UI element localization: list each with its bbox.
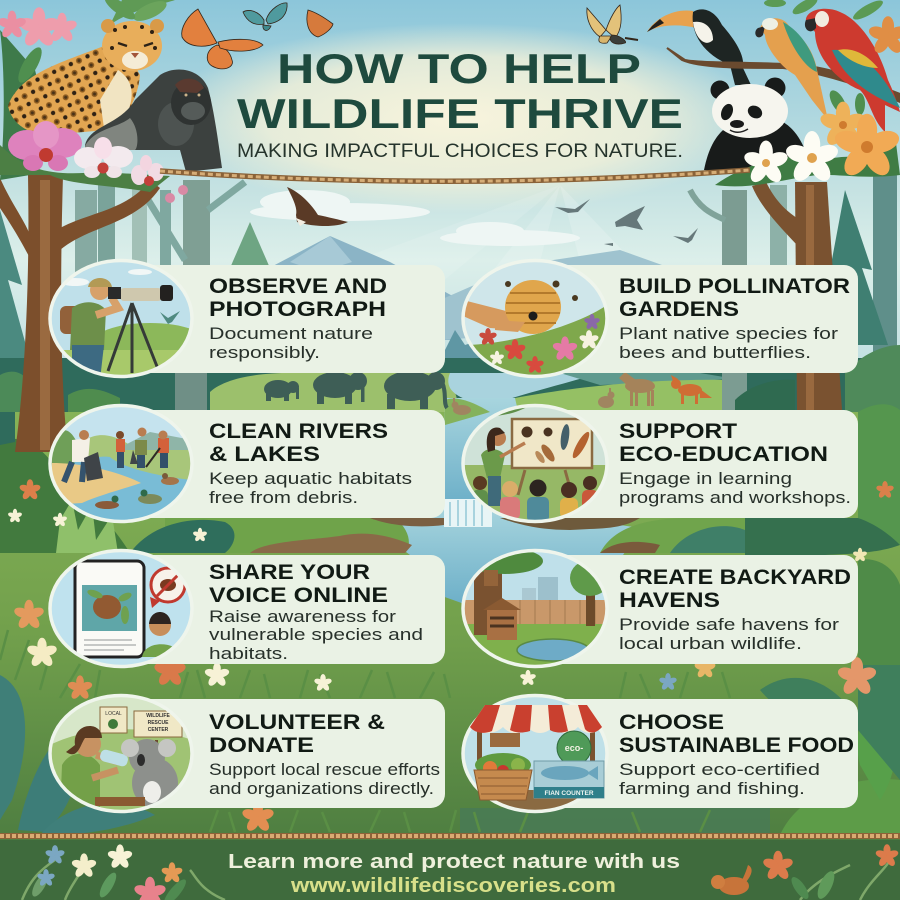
card: choose sustainable food <box>510 699 858 808</box>
main left tree with branches <box>0 175 160 452</box>
card: volunteer and donate <box>100 699 445 808</box>
card: observe and photograph <box>100 265 445 373</box>
card: volunteer and donate: Support local rescue efforts <box>209 760 440 779</box>
card: build pollinator gardens: Plant native species for <box>619 324 838 343</box>
distant wildlife: goat, fox and rabbit <box>598 366 712 408</box>
card: choose sustainable food: CHOOSE <box>619 711 724 734</box>
card: share your voice online: Raise awareness for <box>209 607 396 626</box>
icon: phone with turtle post and no-poaching badge <box>50 550 192 668</box>
card: support eco-education: Engage in learning <box>619 469 792 488</box>
card: clean rivers and lakes: & LAKES <box>209 443 320 466</box>
icon: market stall with produce basket and fish counter: eco- <box>565 743 583 753</box>
icon: volunteer feeding a koala: LOCAL <box>105 711 122 717</box>
card: build pollinator gardens: GARDENS <box>619 298 739 321</box>
card: support eco-education <box>510 410 858 518</box>
gorilla <box>85 69 222 172</box>
card: build pollinator gardens: bees and butterflies. <box>619 343 811 362</box>
macaws on branch <box>667 0 900 132</box>
icon: volunteer feeding a koala: CENTER <box>148 727 169 733</box>
icon: volunteer feeding a koala: RESCUE <box>148 720 169 726</box>
butterflies <box>182 3 638 69</box>
footer panel <box>0 840 900 900</box>
footer rope <box>0 833 900 839</box>
card: clean rivers and lakes: free from debris. <box>209 488 358 507</box>
card: create backyard havens: HAVENS <box>619 589 720 612</box>
card: volunteer and donate: and organizations directly. <box>209 779 434 798</box>
card: observe and photograph: PHOTOGRAPH <box>209 298 386 321</box>
foreground foliage and wildflowers <box>0 479 900 835</box>
icon: market stall with produce basket and fish counter: FIAN COUNTER <box>544 790 594 797</box>
icon: volunteer feeding a koala <box>50 695 192 815</box>
icon: teacher with children at a nature board <box>463 405 607 525</box>
card: share your voice online: habitats. <box>209 644 288 663</box>
card: choose sustainable food: SUSTAINABLE FOOD <box>619 734 854 757</box>
right side flower cluster <box>715 88 900 186</box>
panda <box>704 78 808 172</box>
card: observe and photograph: Document nature <box>209 324 373 343</box>
card: clean rivers and lakes: CLEAN RIVERS <box>209 420 388 443</box>
card: observe and photograph: OBSERVE AND <box>209 275 387 298</box>
footer panel: www.wildlifediscoveries.com <box>290 875 616 897</box>
card: support eco-education: SUPPORT <box>619 420 737 443</box>
title: HOW TO HELP <box>277 45 641 92</box>
card: share your voice online: SHARE YOUR <box>209 561 370 584</box>
rope across header <box>160 170 750 181</box>
icon: beehive and wildflowers <box>463 260 607 380</box>
distant wildlife: elephant herd and rabbit <box>264 371 471 415</box>
card: clean rivers and lakes: Keep aquatic habitats <box>209 469 412 488</box>
top left foliage and pink blossoms <box>0 0 175 180</box>
title: WILDLIFE THRIVE <box>237 90 683 137</box>
card: choose sustainable food: Support eco-certified <box>619 760 820 779</box>
toucan <box>647 9 751 85</box>
subtitle: MAKING IMPACTFUL CHOICES FOR NATURE. <box>237 141 683 162</box>
icon: market stall with produce basket and fish counter <box>463 695 607 815</box>
card: choose sustainable food: farming and fishing. <box>619 779 805 798</box>
card: share your voice online: VOICE ONLINE <box>209 584 388 607</box>
card: create backyard havens: Provide safe havens for <box>619 615 839 634</box>
card: share your voice online <box>100 555 445 664</box>
card: create backyard havens <box>510 555 858 664</box>
orchid flowers <box>0 121 188 203</box>
leopard on branch <box>8 19 164 135</box>
card: volunteer and donate: DONATE <box>209 734 314 757</box>
card: create backyard havens: CREATE BACKYARD <box>619 566 851 589</box>
icon: volunteer feeding a koala: WILDLIFE <box>146 713 170 719</box>
card: clean rivers and lakes <box>100 410 445 518</box>
footer call to action: Learn more and protect nature with us <box>228 851 680 873</box>
icon: river clean-up volunteers and ducks <box>50 405 192 525</box>
card: build pollinator gardens <box>510 265 858 373</box>
card: support eco-education: programs and workshops. <box>619 488 851 507</box>
card: volunteer and donate: VOLUNTEER & <box>209 711 385 734</box>
icon: photographer with tripod <box>48 258 190 378</box>
card: build pollinator gardens: BUILD POLLINATOR <box>619 275 850 298</box>
card: share your voice online: vulnerable species and <box>209 625 423 644</box>
icon: backyard with insect hotel, fence and pond <box>463 548 610 668</box>
main right tree with branches <box>752 182 842 410</box>
card: support eco-education: ECO-EDUCATION <box>619 443 828 466</box>
card: create backyard havens: local urban wildlife. <box>619 634 802 653</box>
title <box>237 45 683 137</box>
footer botanical decoration <box>22 844 899 900</box>
card: observe and photograph: responsibly. <box>209 343 320 362</box>
birds in the sky <box>287 187 698 246</box>
